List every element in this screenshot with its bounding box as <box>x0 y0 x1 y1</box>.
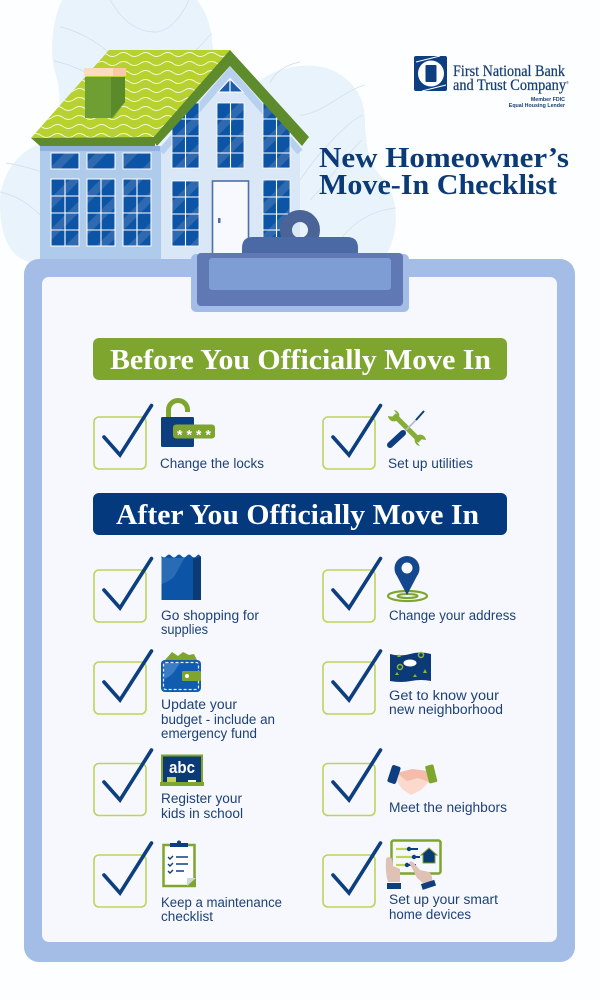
banner: after: After You Officially Move In <box>116 499 479 531</box>
item: change the locks: Change the locks <box>160 456 264 471</box>
checkbox <box>323 558 380 622</box>
checkbox <box>323 750 380 816</box>
item: register kids: Register your <box>161 791 242 806</box>
checkbox <box>94 558 152 622</box>
title: New Homeowner’s <box>319 142 569 174</box>
door <box>212 181 248 259</box>
checkbox <box>323 406 380 469</box>
title <box>319 142 569 201</box>
banner: after <box>93 493 507 535</box>
checkbox <box>94 406 152 469</box>
icon: chalkboard <box>160 756 204 786</box>
gable windows <box>172 103 290 246</box>
icon: padlock: **** <box>177 426 212 442</box>
icon: wallet <box>161 652 201 692</box>
item: update budget <box>94 651 275 741</box>
house illustration <box>31 50 309 260</box>
checkbox <box>94 651 152 714</box>
item: smart home: home devices <box>389 907 471 922</box>
roof <box>31 50 230 138</box>
item: register kids: kids in school <box>161 806 243 821</box>
attic window <box>218 79 243 92</box>
item: smart home <box>323 840 498 922</box>
banner: before: Before You Officially Move In <box>110 344 491 376</box>
bank name: First National Bank <box>453 63 565 80</box>
item: maintenance checklist: Keep a maintenance <box>161 895 282 910</box>
gable wall <box>161 66 300 260</box>
item: get to know neighborhood <box>323 651 503 717</box>
icon: wrench and screwdriver <box>388 410 426 446</box>
clipboard clip <box>191 216 409 312</box>
gable trim <box>152 50 309 146</box>
item: maintenance checklist <box>94 840 282 924</box>
background blobs behind house <box>0 0 396 262</box>
item: meet the neighbors <box>323 750 507 816</box>
item: change your address: Change your address <box>389 608 516 623</box>
checkbox <box>94 750 152 816</box>
item: update budget: Update your <box>161 697 238 712</box>
banner: before <box>93 338 507 380</box>
item: maintenance checklist: checklist <box>161 909 213 924</box>
item: go shopping <box>94 554 260 637</box>
left wing windows <box>51 153 151 246</box>
clipboard board <box>24 259 575 962</box>
icon: smart home tablet <box>386 840 440 890</box>
item: update budget: budget - include an <box>161 712 275 727</box>
item: change the locks <box>94 400 264 471</box>
logo: Equal Housing Lender <box>509 103 565 109</box>
item: get to know neighborhood: Get to know your <box>389 688 500 703</box>
item: go shopping: supplies <box>161 622 208 637</box>
item: register kids <box>94 750 243 821</box>
title: Move-In Checklist <box>319 169 557 201</box>
item: set up utilities: Set up utilities <box>388 456 473 471</box>
roof eave <box>31 137 155 146</box>
checkbox <box>94 843 152 907</box>
item: meet the neighbors: Meet the neighbors <box>389 800 507 815</box>
gable shadow band <box>161 72 300 152</box>
item: set up utilities <box>323 406 473 471</box>
left wing wall <box>40 146 162 260</box>
icon: padlock <box>161 400 215 447</box>
logo <box>414 56 569 109</box>
checkbox <box>323 651 380 714</box>
icon: handshake <box>387 764 438 795</box>
checkbox <box>323 843 380 907</box>
logo mark <box>414 56 447 91</box>
icon: chalkboard: abc <box>169 758 195 777</box>
icon: clipboard checklist <box>164 840 196 887</box>
chimney <box>85 77 125 118</box>
item: update budget: emergency fund <box>161 726 257 741</box>
member text: Member FDIC <box>531 97 565 103</box>
item: get to know neighborhood: new neighborhood <box>389 702 503 717</box>
item: change your address <box>323 556 516 623</box>
item: go shopping: Go shopping for <box>161 608 260 623</box>
icon: location pin <box>388 556 427 601</box>
icon: map <box>390 652 431 682</box>
icon: shopping bag <box>162 554 201 600</box>
item: smart home: Set up your smart <box>389 892 498 907</box>
logo: and Trust Company <box>453 77 566 94</box>
logo: ® <box>566 80 569 85</box>
